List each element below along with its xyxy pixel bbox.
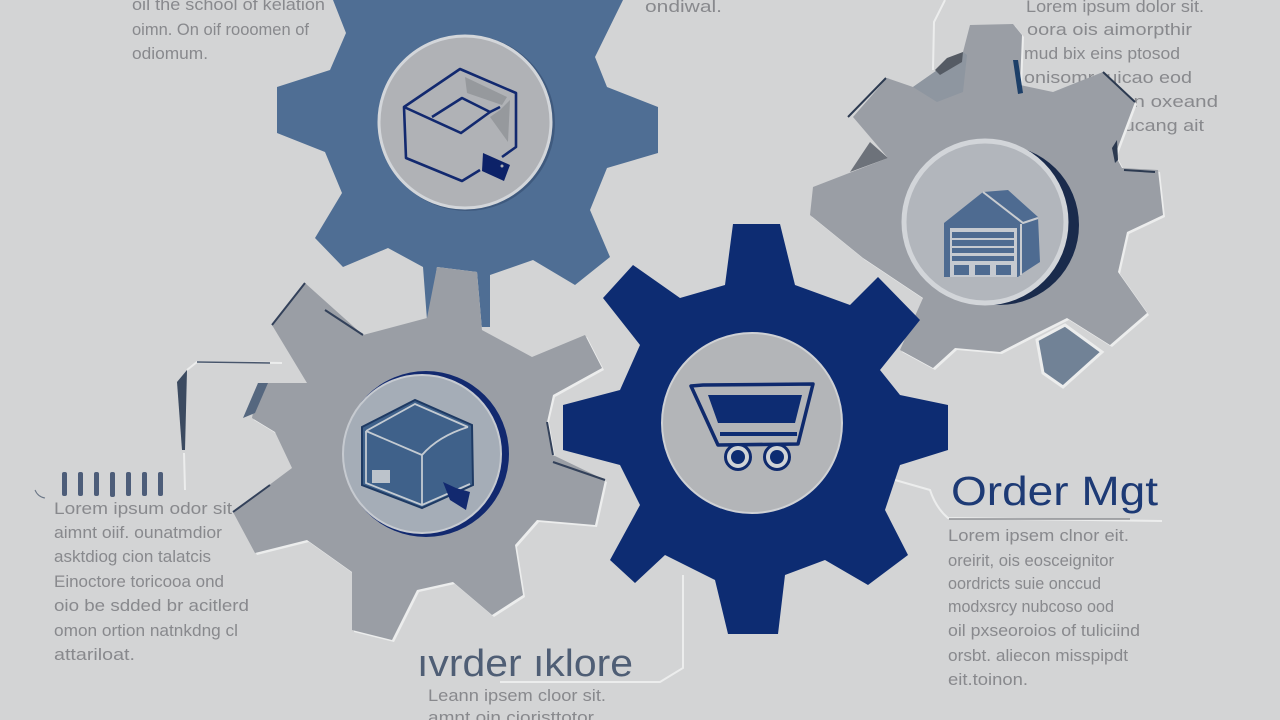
text block: top right: oora ois aimorpthir xyxy=(1027,20,1192,39)
text block: top right: oncditiom inn oxeand xyxy=(1024,92,1218,111)
left heading: blurred bars xyxy=(62,472,163,497)
text block: right: oil pxseoroios of tuliciind xyxy=(948,621,1140,640)
text block: left: Lorem ipsum odor sit xyxy=(54,499,232,518)
text block: top right: onisomr ruicao eod xyxy=(1024,68,1192,87)
icon disc: open box xyxy=(379,35,555,211)
icon: open box outline xyxy=(404,69,516,181)
connector: right title to navy gear xyxy=(895,480,1162,521)
gear hole xyxy=(1037,325,1102,387)
gear: blue top xyxy=(277,0,658,327)
text block: left: oio be sdded br acitlerd xyxy=(54,596,249,615)
text block: top left xyxy=(132,0,325,63)
text block: right: eit.toinon. xyxy=(948,670,1028,689)
text block: top left: oimn. On oif rooomen of xyxy=(132,20,309,39)
text block: left: aimnt oiif. ounatmdior xyxy=(54,523,222,542)
text block: right: orsbt. aliecon misspipdt xyxy=(948,646,1128,665)
text block: right xyxy=(948,526,1140,689)
text block: right: Lorem ipsem clnor eit. xyxy=(948,526,1129,545)
text block: left: omon ortion natnkdng cl xyxy=(54,621,238,640)
text block: bottom xyxy=(428,686,606,720)
gear: navy centre xyxy=(563,224,948,634)
text block: left: attariloat. xyxy=(54,645,135,664)
gear: grey right xyxy=(810,24,1165,387)
icon: cart xyxy=(691,384,813,470)
title: bottom: ıvrder ıklore xyxy=(417,643,633,685)
connector: bottom title to navy gear xyxy=(500,575,683,682)
text block: top right: in eit otucang ait xyxy=(1060,116,1204,135)
icon disc: closed box xyxy=(343,371,509,537)
text block: left: asktdiog cion talatcis xyxy=(54,547,211,566)
text block: left xyxy=(54,499,249,664)
gear: grey lower left xyxy=(233,267,607,642)
icon disc: cart xyxy=(662,333,842,513)
title underline xyxy=(949,518,1130,520)
icon disc: warehouse xyxy=(904,141,1079,305)
icon: warehouse xyxy=(944,190,1040,277)
text block: top right: mud bix eins ptosod xyxy=(1024,44,1180,63)
connector: left gear to left text xyxy=(35,362,282,498)
icon: closed box xyxy=(362,400,473,510)
text block: left: Einoctore toricooa ond xyxy=(54,572,224,591)
text block: right: oordricts suie onccud xyxy=(948,574,1101,593)
text block: right: modxsrcy nubcoso ood xyxy=(948,597,1114,616)
text block: top left: odiomum. xyxy=(132,44,208,63)
text block: top right xyxy=(1024,0,1218,135)
title: Order Mgt: Order Mgt xyxy=(951,468,1159,514)
text block: bottom: Leann ipsem cloor sit. xyxy=(428,686,606,705)
connector: top right xyxy=(933,0,945,70)
text block: right: oreirit, ois eosceignitor xyxy=(948,551,1114,570)
